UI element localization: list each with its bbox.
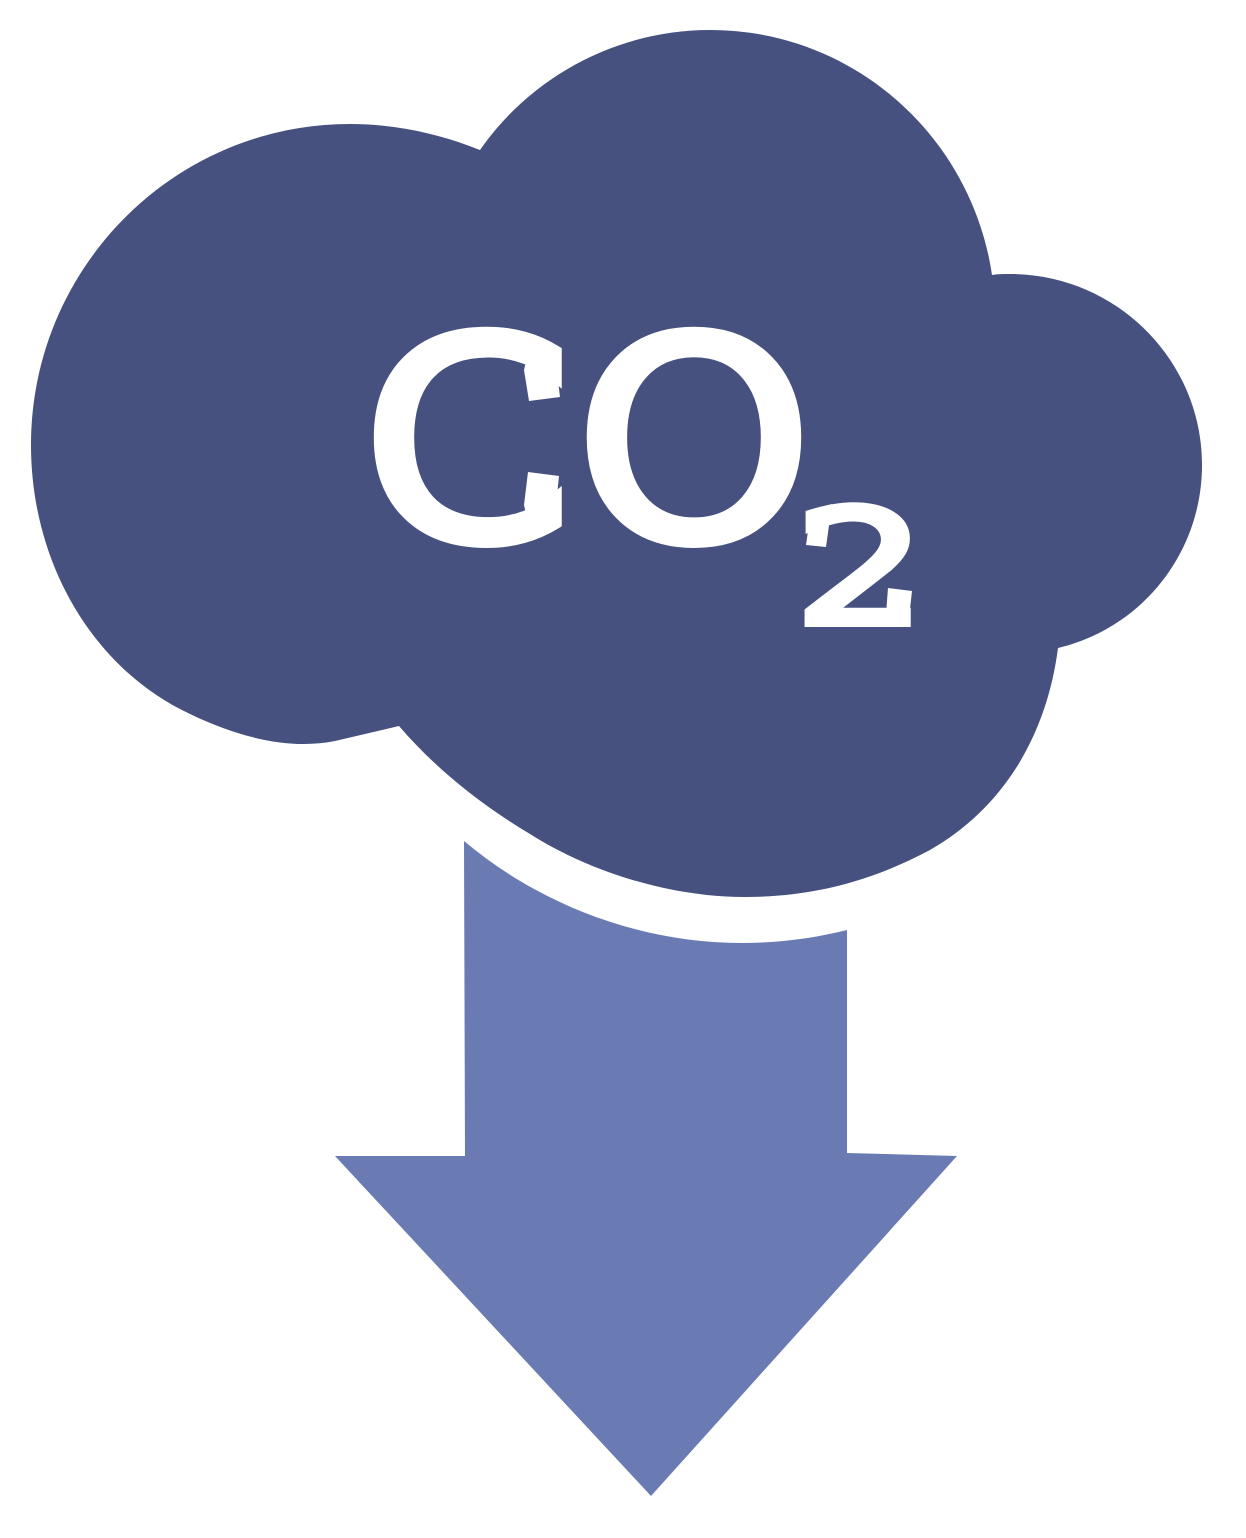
CO label: CO xyxy=(361,278,814,607)
subscript 2: 2 xyxy=(793,475,928,662)
cloud shape xyxy=(31,30,1202,897)
icon: down arrow xyxy=(335,841,957,1496)
icon: cloud with CO2 label xyxy=(31,30,1202,897)
